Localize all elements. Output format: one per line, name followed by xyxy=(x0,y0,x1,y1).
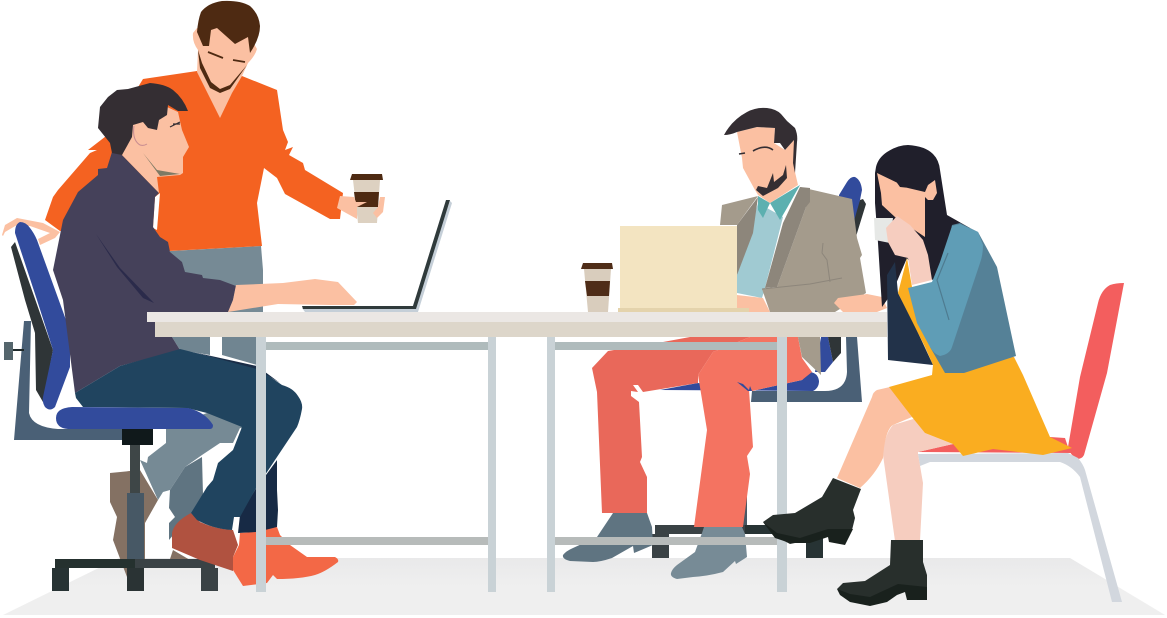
laptop: beige xyxy=(618,226,749,312)
jeans xyxy=(75,349,302,530)
laptop: dark, left xyxy=(302,200,452,312)
boot: back xyxy=(837,540,927,606)
person: woman legs and chair xyxy=(837,283,1124,606)
seat cushion xyxy=(56,407,213,429)
floor xyxy=(3,558,1165,615)
trousers: standing man xyxy=(170,246,263,365)
front leg: woman xyxy=(837,387,912,488)
back leg: woman xyxy=(883,417,953,541)
person: standing man xyxy=(45,1,385,365)
face: woman xyxy=(877,173,937,237)
shirt and hand xyxy=(737,203,783,312)
coffee cup in hand xyxy=(337,174,385,223)
seat post block xyxy=(122,429,153,445)
jacket: woman xyxy=(908,223,1016,373)
person: woman upper body xyxy=(874,145,1072,456)
sweater xyxy=(45,71,343,251)
hand: middle man xyxy=(834,294,887,312)
seated chair base xyxy=(52,445,218,591)
dark top xyxy=(887,262,933,365)
head: standing man xyxy=(193,1,260,118)
chair: rear office chair behind middle man xyxy=(652,177,866,558)
arm: seated man xyxy=(228,279,357,312)
shoes: middle man xyxy=(563,513,747,579)
chair: left office chair xyxy=(2,218,158,577)
jacket: middle man xyxy=(720,187,866,312)
table legs and crossbars xyxy=(256,337,787,592)
shirt: seated man xyxy=(53,152,236,393)
chair: red chair xyxy=(918,283,1124,602)
rear leg of standing man below seat xyxy=(140,413,250,560)
shoes: seated man xyxy=(172,460,338,586)
dress xyxy=(889,258,1072,456)
collar xyxy=(758,185,800,220)
cup: white xyxy=(874,218,893,243)
hair: woman xyxy=(875,145,970,307)
coffee cup on table xyxy=(581,263,613,312)
head: middle man xyxy=(724,108,798,203)
person: seated man xyxy=(52,83,357,591)
head: seated man xyxy=(98,83,189,193)
jacket lower part xyxy=(798,337,821,375)
boot: front xyxy=(763,478,861,545)
arm: woman xyxy=(886,216,932,285)
trousers: middle man xyxy=(592,337,812,527)
table xyxy=(147,312,887,592)
person: middle man xyxy=(563,108,866,579)
table top xyxy=(147,312,887,337)
